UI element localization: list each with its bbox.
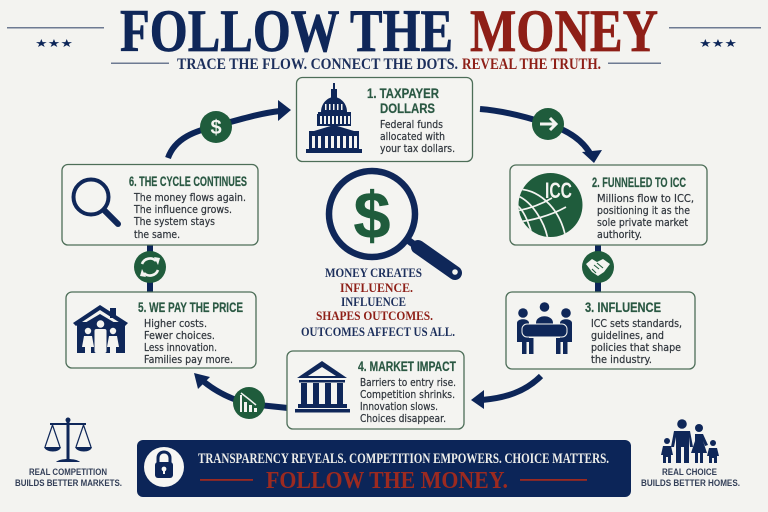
body text: Fewer choices. [144,330,215,342]
heading: 1. TAXPAYER [367,86,439,101]
icon: house with family [73,305,128,353]
body text: The money flows again. [133,192,246,204]
body text: ICC sets standards, [591,318,682,330]
icon: handshake [586,259,610,276]
icon: bank building [295,361,350,412]
heading: DOLLARS [380,101,435,116]
caption: REAL COMPETITION [29,467,107,477]
banner [137,440,631,497]
body text: positioning it as the [597,205,690,217]
header: right ornament: ★★★ [699,37,737,50]
panel: 2 funneled to ICC [510,165,707,245]
body text: allocated with [380,131,445,143]
heading: 2. FUNNELED TO ICC [592,175,686,190]
subtitle: REVEAL THE TRUTH. [462,56,601,73]
icon: scales of justice [44,418,92,462]
panel: 1 taxpayer dollars [296,78,472,162]
body text: Choices disappear. [360,413,446,425]
icon: ICC globe: ICC [545,178,572,203]
panel: 4 market impact [287,351,464,429]
body text: guidelines, and [591,330,664,342]
header: left ornament: ★★★ [35,37,73,50]
heading: 6. THE CYCLE CONTINUES [129,174,247,189]
banner call to action: FOLLOW THE MONEY. [266,468,508,494]
heading: 4. MARKET IMPACT [358,359,457,374]
body text: The system stays [133,216,215,228]
icon: padlock [144,447,184,487]
left footer: scales and caption [15,418,122,488]
arrow: cycle to taxpayer dollars: $ [210,117,222,139]
right footer: family and caption [641,419,740,488]
icon: small magnifier [74,180,118,224]
central message: OUTCOMES AFFECT US ALL. [301,324,455,339]
icon: ICC globe [516,173,582,240]
arrow: ICC to influence [582,245,614,292]
body text: Higher costs. [144,318,207,330]
caption: REAL CHOICE [662,467,717,477]
arrow: we pay the price to cycle continues [134,245,166,292]
subtitle: TRACE THE FLOW. CONNECT THE DOTS. [177,56,458,73]
panel: 5 we pay the price [66,292,256,368]
body text: The influence grows. [133,204,232,216]
central message: INFLUENCE [341,294,406,309]
icon: family [661,419,719,463]
body text: Millions flow to ICC, [597,193,694,205]
body text: Less innovation. [144,342,217,354]
caption: BUILDS BETTER MARKETS. [15,478,122,488]
body text: Competition shrinks. [360,389,455,401]
panel: 3 influence [506,292,695,369]
body text: Barriers to entry rise. [360,377,456,389]
subtitle [111,56,661,73]
arrow: influence to market impact [471,376,541,409]
icon: meeting table [517,302,572,354]
heading: 3. INFLUENCE [585,300,661,315]
banner message: TRANSPARENCY REVEALS. COMPETITION EMPOWERS. CHOICE MATTERS. [198,451,609,467]
icon: falling chart [240,393,257,412]
central message: INFLUENCE. [340,280,413,295]
body text: Federal funds [380,119,443,131]
icon: central magnifying glass with dollar [329,171,458,275]
arrow: cycle to taxpayer dollars [168,100,291,158]
body text: policies that shape [591,342,681,354]
body text: your tax dollars. [380,143,455,155]
central message [301,265,455,339]
central message: MONEY CREATES [325,265,422,280]
body text: the same. [134,229,180,241]
icon: capitol [306,83,362,153]
panel: 6 the cycle continues [62,164,258,245]
body text: Families pay more. [144,354,233,366]
header: right ornament [669,27,761,50]
arrow: taxpayer dollars to ICC [480,108,602,163]
header: left ornament [7,27,104,50]
heading: 5. WE PAY THE PRICE [138,300,243,315]
body text: authority. [597,229,642,241]
icon: refresh [140,257,160,277]
body text: Innovation slows. [360,401,438,413]
caption: BUILDS BETTER HOMES. [641,478,740,488]
icon: central magnifying glass with dollar: $ [354,178,390,252]
central message: SHAPES OUTCOMES. [316,308,433,323]
body text: the industry. [591,354,652,366]
arrow: market impact to we pay the price [194,373,288,419]
body text: sole private market [597,217,688,229]
